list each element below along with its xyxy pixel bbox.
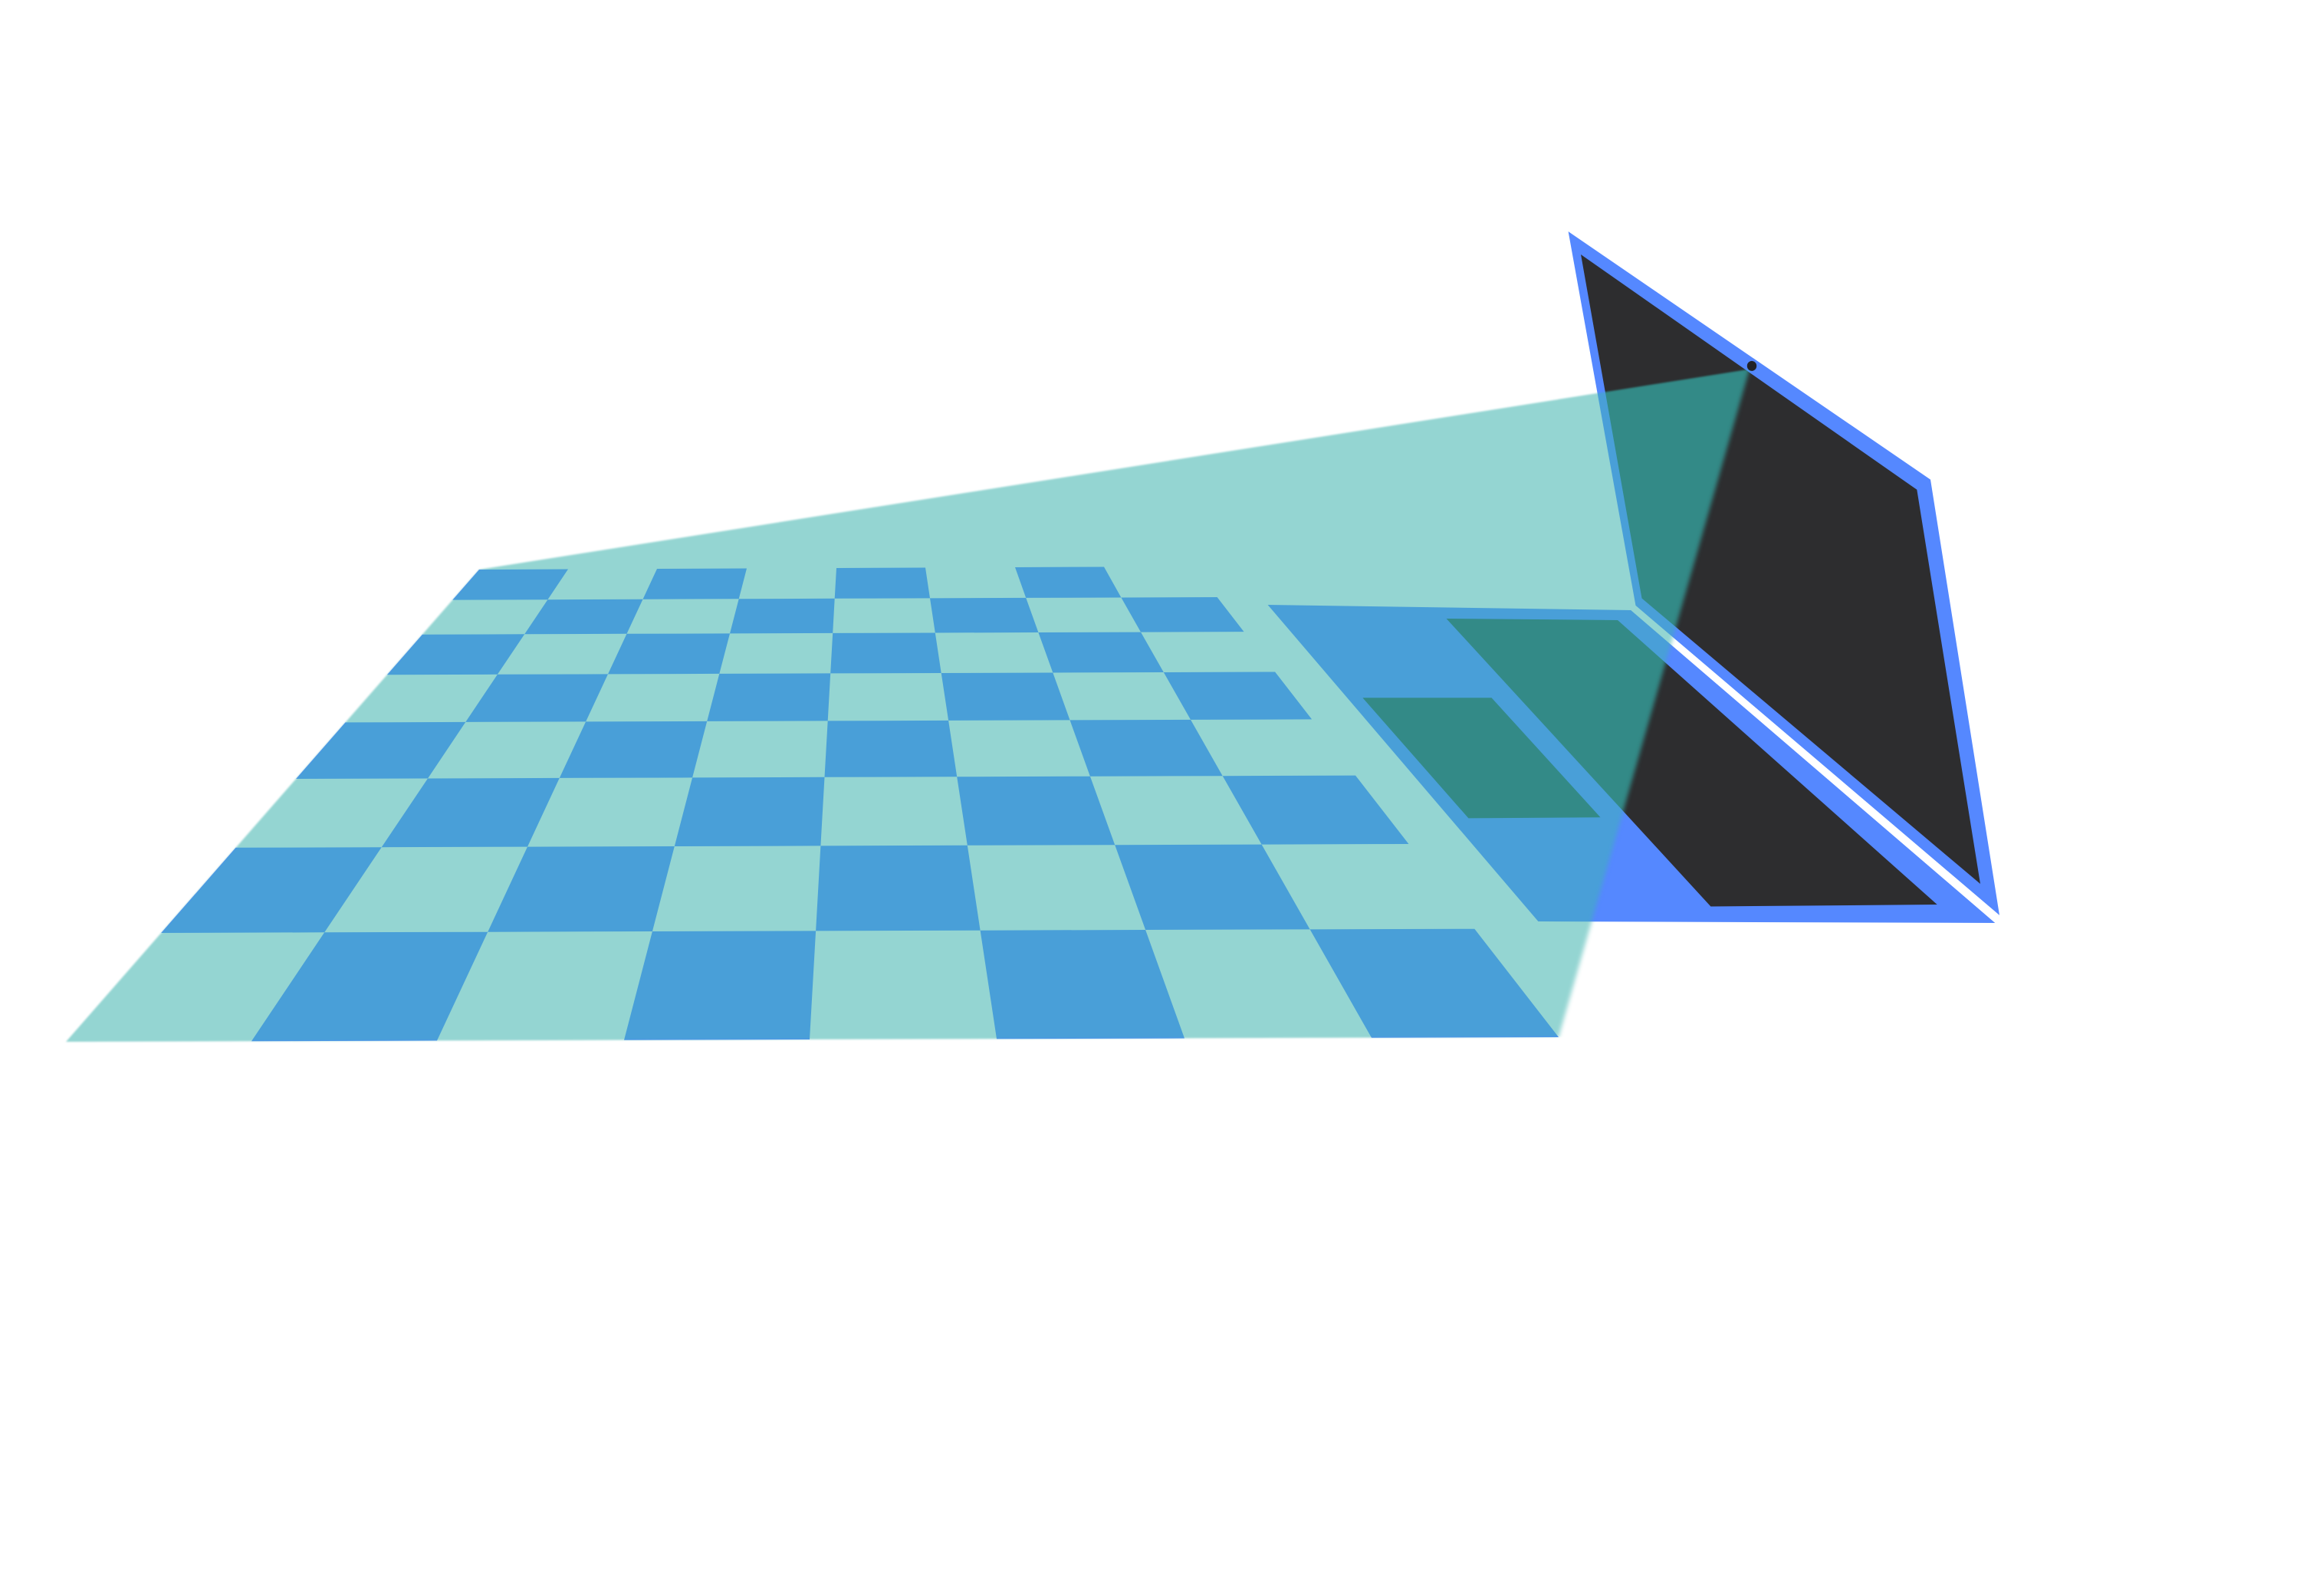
- panel: small dark parallelogram: [1362, 698, 1601, 818]
- icon: apex point marker: [1747, 361, 1756, 371]
- diagram: chessboard projected from a folded camera shape: [66, 232, 1999, 1043]
- panel: upper dark face: [1581, 255, 1980, 884]
- white fold line: [1631, 606, 1999, 923]
- chessboard dark squares: [161, 567, 1559, 1041]
- panel: upper blue frame: [1569, 232, 1999, 915]
- panel: lower blue frame: [1268, 605, 1995, 923]
- panel: lower dark face: [1447, 619, 1937, 906]
- floor plane overlay: [66, 369, 1751, 1043]
